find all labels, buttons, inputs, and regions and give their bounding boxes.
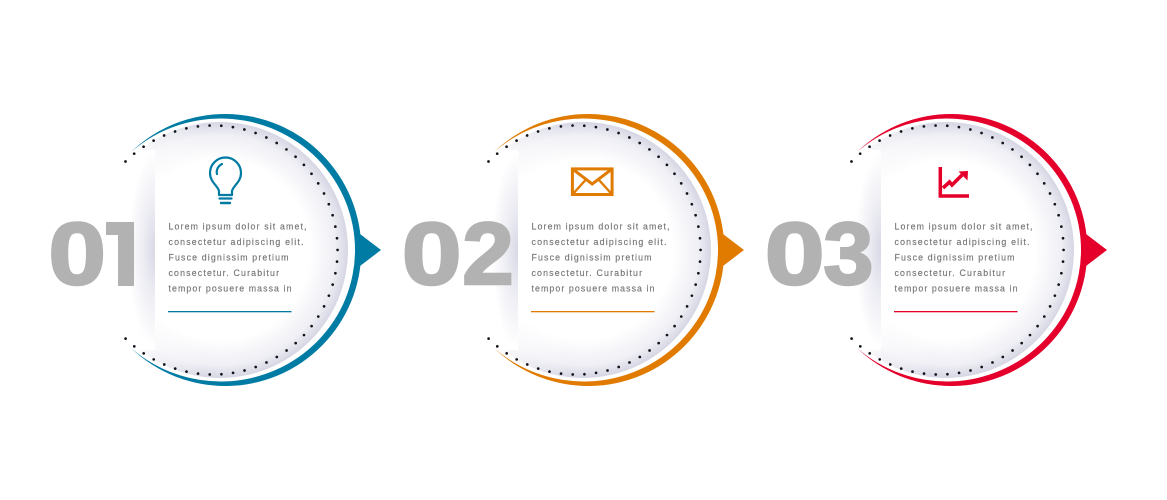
underline xyxy=(894,311,1018,312)
body text: consectetur. Curabitur xyxy=(894,268,1005,278)
number 03 xyxy=(765,204,873,303)
body text xyxy=(894,222,1032,294)
dotted ring xyxy=(852,126,1064,374)
dotted ring xyxy=(126,126,338,374)
tapered ring xyxy=(131,114,361,386)
number 02: 0 xyxy=(402,204,462,303)
body text: consectetur adipiscing elit. xyxy=(532,237,666,247)
number 02 xyxy=(402,204,514,303)
background disc xyxy=(146,122,348,378)
tapered ring xyxy=(494,114,724,386)
arrow marker xyxy=(1086,234,1107,266)
body text: consectetur adipiscing elit. xyxy=(894,237,1030,247)
panel: step 03 xyxy=(765,114,1107,386)
icon: growth chart xyxy=(940,167,969,196)
underline xyxy=(531,311,654,312)
body text: Fusce dignissim pretium xyxy=(532,252,652,262)
body text: Lorem ipsum dolor sit amet, xyxy=(168,222,306,232)
dotted ring xyxy=(488,126,701,374)
left panel shadow xyxy=(851,150,881,350)
body text xyxy=(532,222,670,294)
number 01: 1 xyxy=(101,204,150,303)
body text: consectetur adipiscing elit. xyxy=(168,237,304,247)
panel: step 02 xyxy=(402,114,744,386)
left panel shadow xyxy=(125,150,155,350)
body text: tempor posuere massa in xyxy=(168,284,292,294)
number 03: 3 xyxy=(823,204,873,303)
body text: Lorem ipsum dolor sit amet, xyxy=(532,222,670,232)
number 03: 0 xyxy=(765,204,825,303)
icon: envelope xyxy=(572,169,612,194)
number 02: 2 xyxy=(462,204,514,303)
arrow marker xyxy=(723,234,744,266)
background disc xyxy=(509,122,711,378)
body text xyxy=(168,222,306,294)
body text: Lorem ipsum dolor sit amet, xyxy=(894,222,1032,232)
body text: Fusce dignissim pretium xyxy=(168,252,288,262)
arrow marker xyxy=(360,234,381,266)
body text: tempor posuere massa in xyxy=(532,284,655,294)
body text: Fusce dignissim pretium xyxy=(894,252,1014,262)
body text: tempor posuere massa in xyxy=(894,284,1018,294)
number 01 xyxy=(51,221,134,286)
icon: light bulb xyxy=(210,158,241,203)
underline xyxy=(168,311,292,312)
body text: consectetur. Curabitur xyxy=(168,268,279,278)
number 01: 0 xyxy=(48,204,106,303)
body text: consectetur. Curabitur xyxy=(532,268,642,278)
panel: step 01 xyxy=(48,114,381,386)
left panel shadow xyxy=(488,150,518,350)
background disc xyxy=(872,122,1074,378)
tapered ring xyxy=(857,114,1087,386)
